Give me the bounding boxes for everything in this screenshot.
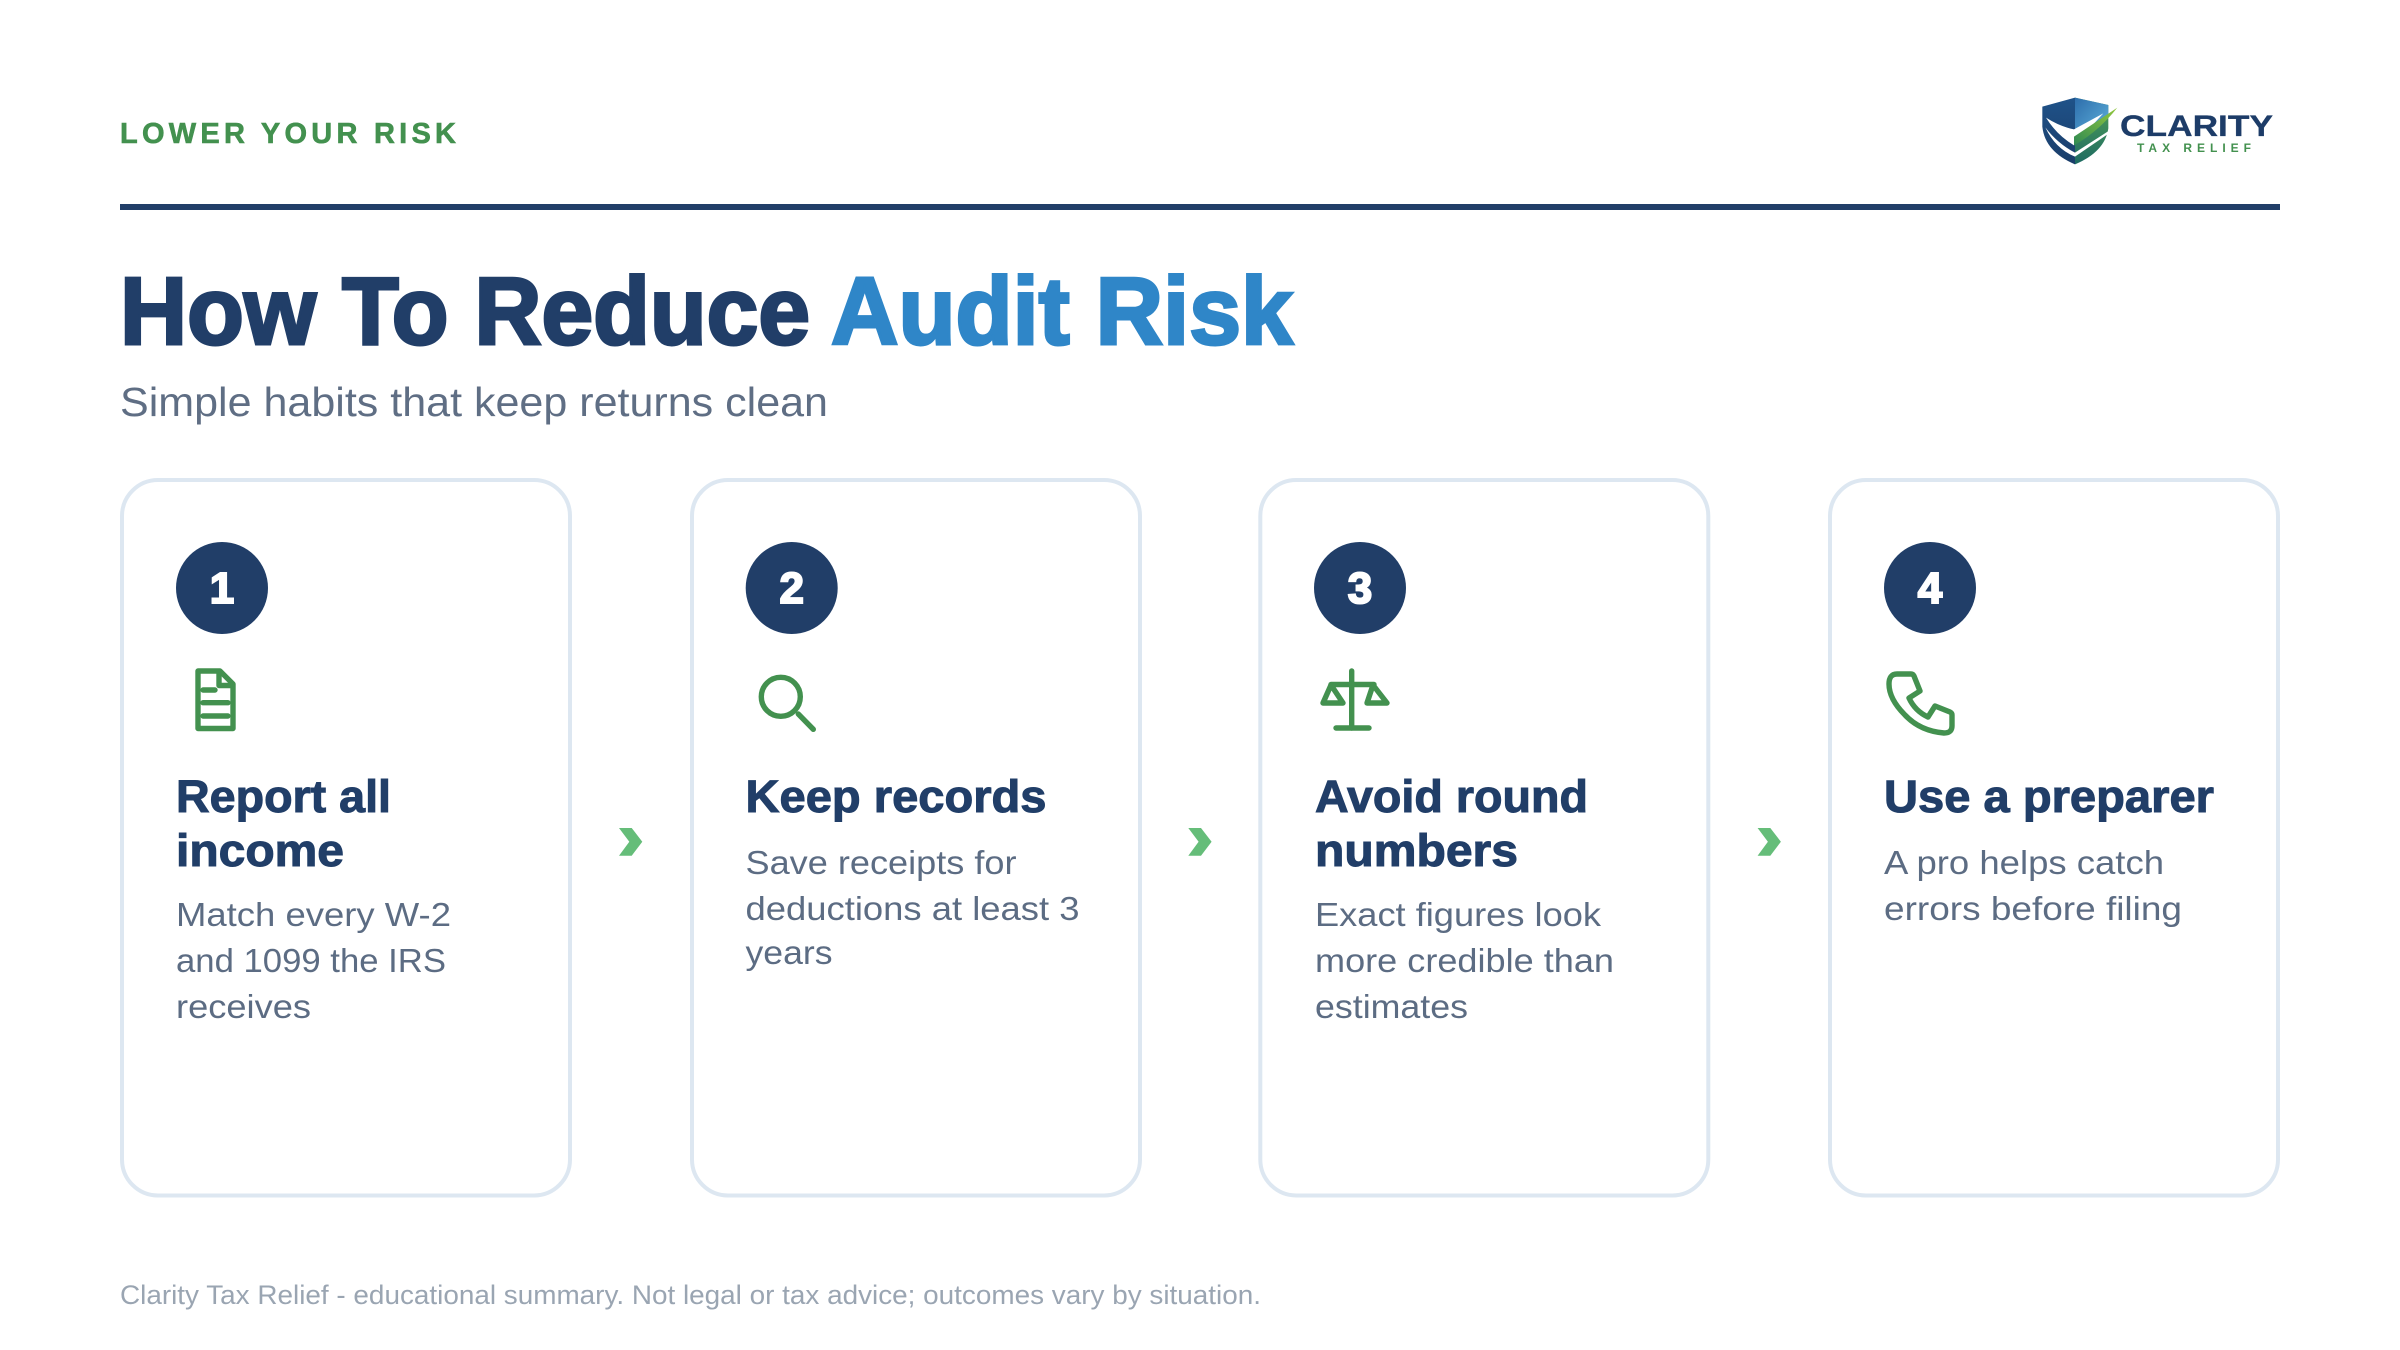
description (746, 844, 1080, 971)
description: and 1099 the IRS (176, 942, 446, 979)
panel: step 4 use a preparer (1830, 480, 2278, 1196)
subtitle: Simple habits that keep returns clean (120, 379, 828, 425)
arrow 3 (1758, 828, 1781, 856)
description (176, 896, 451, 1025)
heading (176, 771, 391, 876)
step number 4 (1884, 542, 1976, 634)
panel: step 1 report all income (122, 480, 570, 1196)
icon: shield with check (2042, 98, 2117, 164)
heading: Avoid round (1315, 771, 1588, 822)
heading: income (176, 825, 344, 876)
logo wordmark: CLARITY (2120, 110, 2273, 143)
step number 1 (176, 542, 268, 634)
step number 4: 4 (1918, 564, 1943, 613)
arrow 2 (1188, 828, 1212, 856)
step number 1: 1 (210, 564, 234, 613)
panel: step 3 avoid round numbers (1260, 480, 1708, 1196)
heading: Use a preparer (1884, 771, 2214, 822)
step number 3 (1314, 542, 1406, 634)
panel: step 2 keep records (692, 480, 1140, 1196)
icon: document (198, 671, 233, 728)
description: deductions at least 3 (746, 890, 1080, 927)
description: Save receipts for (746, 844, 1016, 881)
title: Audit Risk (831, 258, 1294, 365)
description: years (746, 934, 832, 971)
description: receives (176, 988, 311, 1025)
eyebrow: lower your risk: LOWER YOUR RISK (120, 118, 456, 150)
description: Match every W-2 (176, 896, 451, 933)
description (1315, 896, 1614, 1025)
header rule (120, 204, 2280, 210)
footer disclaimer: Clarity Tax Relief - educational summary. Not legal or tax advice; outcomes vary by situation. (120, 1280, 1261, 1310)
step number 2: 2 (779, 564, 804, 613)
description: more credible than (1315, 942, 1614, 979)
heading (1315, 771, 1588, 876)
description (1884, 844, 2182, 927)
description: estimates (1315, 988, 1468, 1025)
description: A pro helps catch (1884, 844, 2164, 881)
heading: numbers (1315, 825, 1518, 876)
description: errors before filing (1884, 890, 2182, 927)
icon: magnifier (761, 677, 813, 729)
arrow 1 (619, 828, 642, 856)
icon: balance scale (1323, 671, 1387, 728)
title (120, 258, 1294, 365)
icon: phone (1889, 674, 1952, 733)
step number 2 (746, 542, 838, 634)
logo: Clarity Tax Relief (2042, 98, 2273, 164)
heading: Report all (176, 771, 391, 822)
description: Exact figures look (1315, 896, 1602, 933)
title: How To Reduce (120, 258, 810, 365)
logo tagline: TAX RELIEF (2137, 141, 2251, 155)
step number 3: 3 (1348, 564, 1372, 613)
heading: Keep records (746, 771, 1046, 822)
